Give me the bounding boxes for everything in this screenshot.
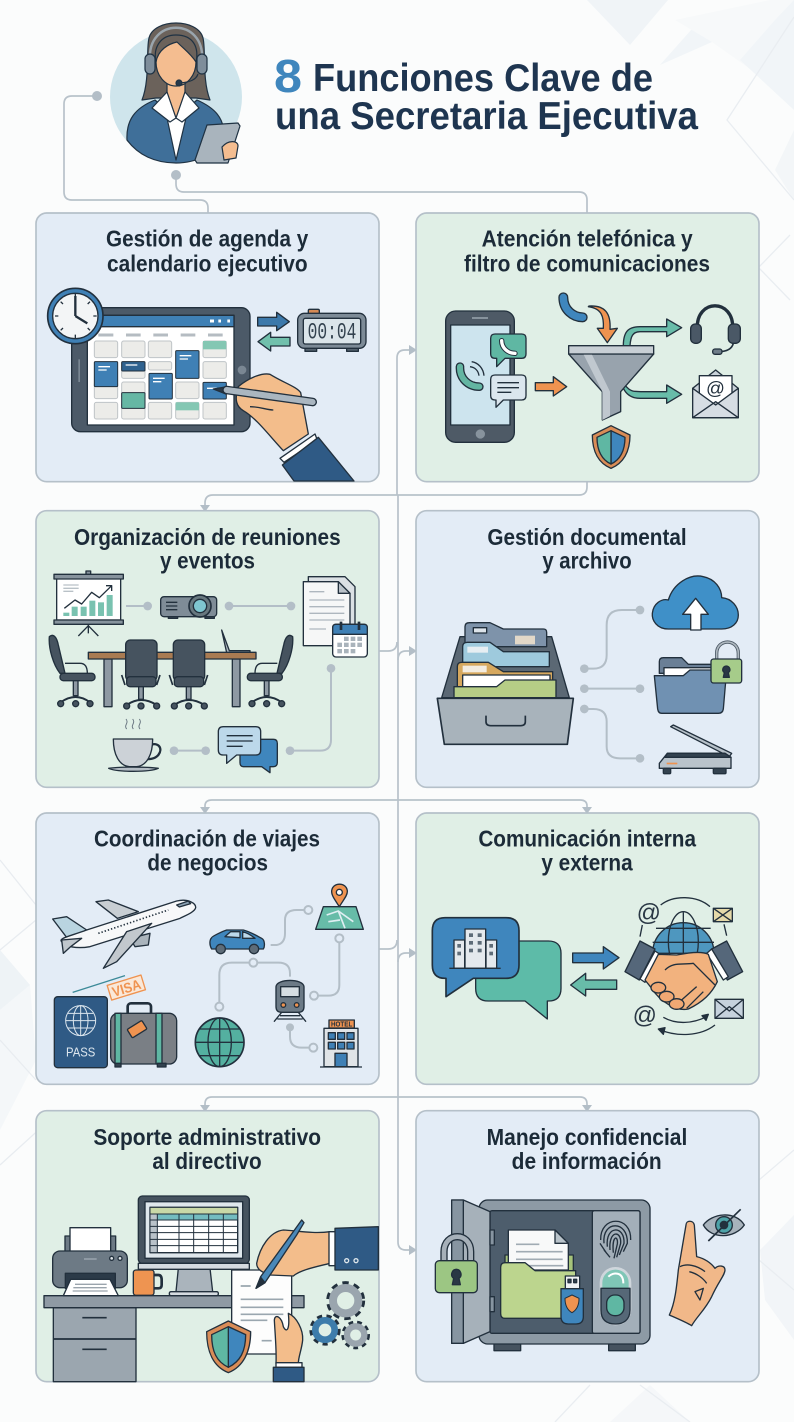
icon: smartphone bbox=[446, 311, 514, 442]
heading bbox=[487, 524, 687, 573]
title bbox=[274, 50, 698, 138]
icon: presentation screen bbox=[54, 571, 123, 636]
panel: soporte administrativo bbox=[36, 1111, 379, 1382]
icon: envelope with at sign: @ bbox=[706, 377, 725, 398]
heading bbox=[94, 826, 320, 876]
heading: Comunicación interna bbox=[478, 826, 696, 852]
heading: al directivo bbox=[152, 1148, 262, 1174]
heading: de información bbox=[512, 1148, 662, 1174]
panel: manejo confidencial bbox=[416, 1111, 759, 1382]
icon: digital timer: 00:04 bbox=[308, 320, 356, 346]
panel: gestión de agenda bbox=[36, 213, 379, 482]
icon: filing drawer bbox=[437, 623, 573, 744]
heading: filtro de comunicaciones bbox=[464, 250, 710, 276]
arrow: from timer bbox=[258, 332, 290, 351]
heading bbox=[478, 826, 696, 876]
icon: globe bbox=[653, 912, 714, 972]
icon: wall clock bbox=[48, 288, 103, 344]
icon: globe bbox=[195, 1018, 244, 1067]
icon: message bubble bbox=[491, 375, 526, 407]
panel: gestión documental bbox=[416, 511, 759, 787]
panel: atención telefónica bbox=[416, 213, 759, 482]
icon: biometric capsule bbox=[601, 1268, 630, 1324]
heading: Gestión documental bbox=[487, 524, 687, 550]
icon: train bbox=[274, 980, 306, 1022]
icon: at signs, envelopes and arcs bbox=[633, 898, 743, 1035]
illustration: secretary with headset bbox=[110, 23, 242, 163]
icon: blue speech bubble with building bbox=[432, 918, 519, 997]
icon: usb key bbox=[561, 1276, 583, 1324]
arrow: from handshake bbox=[571, 973, 617, 996]
icon: tablet calendar bbox=[72, 308, 250, 432]
illustration: meeting table bbox=[88, 630, 256, 707]
icon: hand writing with stylus bbox=[213, 374, 354, 481]
connector lines bbox=[580, 606, 644, 763]
icon: cloud upload bbox=[652, 576, 738, 630]
title: 8 bbox=[274, 50, 302, 102]
icon: scanner bbox=[659, 725, 732, 774]
icon: document bbox=[232, 1270, 292, 1354]
arrow: teal up to headset bbox=[623, 319, 682, 346]
icon: handshake bbox=[625, 941, 743, 1009]
arrow: orange curved bbox=[588, 306, 617, 343]
arrow: to timer bbox=[258, 312, 289, 331]
arrow: to handshake bbox=[573, 947, 619, 969]
icon: hotel bbox=[320, 1020, 362, 1067]
icon: writing hand with pen bbox=[256, 1220, 378, 1288]
heading: Gestión de agenda y bbox=[106, 226, 309, 252]
icon: shield bbox=[207, 1321, 251, 1373]
icon: shield bbox=[592, 426, 630, 468]
icon: fingerprint bbox=[600, 1221, 631, 1258]
heading: de negocios bbox=[147, 850, 268, 876]
icon: digital timer bbox=[298, 309, 366, 351]
heading bbox=[106, 226, 309, 276]
heading: calendario ejecutivo bbox=[107, 250, 308, 276]
panel: comunicación interna y externa bbox=[416, 813, 759, 1084]
icon: hotel: HOTEL bbox=[331, 1021, 353, 1028]
icon: at signs, envelopes and arcs: @ bbox=[637, 899, 661, 926]
icon: blue handset bbox=[563, 297, 583, 317]
heading bbox=[487, 1124, 687, 1174]
icon: padlock bbox=[435, 1237, 477, 1293]
icon: printer bbox=[53, 1228, 127, 1296]
icon: open safe bbox=[452, 1200, 650, 1351]
heading bbox=[74, 524, 341, 573]
icon: documents and calendar bbox=[303, 577, 367, 657]
icon: route connectors bbox=[215, 906, 343, 1052]
icon: folder with document bbox=[501, 1230, 576, 1318]
icon: monitor with spreadsheet bbox=[138, 1196, 249, 1296]
connector dots bbox=[126, 602, 335, 755]
heading: Coordinación de viajes bbox=[94, 826, 320, 852]
icon: chat bubble with phone bbox=[491, 334, 526, 367]
icon: chairs bbox=[49, 635, 293, 709]
connector network bbox=[64, 91, 592, 1255]
heading: Organización de reuniones bbox=[74, 524, 341, 550]
icon: at signs, envelopes and arcs: @ bbox=[633, 1002, 657, 1029]
icon: speech bubbles bbox=[218, 727, 277, 773]
icon: car bbox=[210, 930, 264, 954]
icon: airplane bbox=[53, 900, 196, 968]
icon: map with pin bbox=[316, 884, 363, 929]
heading: y eventos bbox=[160, 547, 255, 573]
title: una Secretaria Ejecutiva bbox=[275, 95, 698, 138]
icon: locked folder bbox=[654, 642, 742, 713]
title: Funciones Clave de bbox=[313, 57, 653, 100]
heading: Manejo confidencial bbox=[487, 1124, 687, 1150]
icon: funnel bbox=[569, 346, 654, 420]
heading bbox=[464, 226, 710, 276]
icon: suitcase bbox=[111, 1003, 177, 1067]
icon: passport and visa: PASS bbox=[66, 1045, 95, 1059]
icon: gears bbox=[312, 1285, 367, 1347]
icon: hand with raised finger bbox=[669, 1221, 725, 1326]
icon: desk bbox=[44, 1296, 304, 1382]
heading: Soporte administrativo bbox=[93, 1124, 321, 1150]
icon: coffee mug bbox=[133, 1254, 162, 1295]
heading bbox=[93, 1124, 321, 1174]
arrow: teal down to mail bbox=[623, 385, 682, 403]
icon: headset bbox=[691, 306, 740, 354]
arrow: orange to funnel bbox=[535, 377, 567, 396]
icon: passport and visa bbox=[54, 975, 146, 1068]
icon: hand holding document bbox=[273, 1313, 304, 1382]
icon: envelope with at sign bbox=[693, 370, 738, 418]
heading: y archivo bbox=[542, 547, 632, 573]
icon: crossed eye bbox=[703, 1209, 744, 1241]
icon: passport and visa: VISA bbox=[110, 976, 143, 1000]
panel: coordinación de viajes bbox=[36, 813, 379, 1084]
heading: Atención telefónica y bbox=[482, 226, 693, 252]
icon: projector bbox=[161, 595, 217, 618]
panel: organización de reuniones bbox=[36, 511, 379, 787]
heading: y externa bbox=[541, 850, 633, 876]
icon: teal speech bubble bbox=[476, 941, 561, 1019]
icon: coffee cup bbox=[109, 719, 160, 771]
